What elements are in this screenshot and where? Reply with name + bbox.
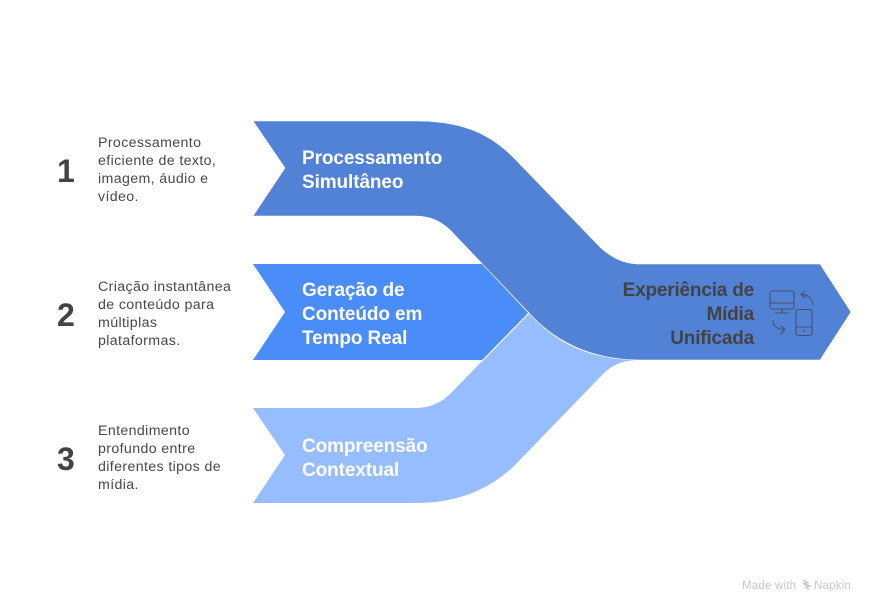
description 2: múltiplas — [98, 315, 157, 331]
heading: Experiência de Mídia Unificada: Experiência de — [623, 280, 754, 301]
description 2: Criação instantânea — [98, 279, 231, 295]
heading: Processamento Simultâneo: Simultâneo — [302, 172, 403, 193]
description 2: de conteúdo para — [98, 297, 214, 313]
heading: Experiência de Mídia Unificada: Mídia — [706, 304, 755, 325]
band 2: Geração de Conteúdo em Tempo Real — [253, 264, 529, 360]
band 1: Processamento Simultâneo, merged output arrow — [253, 121, 851, 360]
description 1: Processamento — [98, 135, 201, 151]
watermark: Made with Napkin: Napkin — [814, 580, 851, 592]
number 2: 2 — [57, 297, 75, 333]
description 3: profundo entre — [98, 441, 195, 457]
description 3: mídia. — [98, 477, 139, 493]
watermark: Made with Napkin: Made with — [742, 580, 796, 592]
band 3: Compreensão Contextual — [253, 313, 640, 503]
description 3: diferentes tipos de — [98, 459, 221, 475]
description 1: vídeo. — [98, 189, 139, 205]
heading: Processamento Simultâneo: Processamento — [302, 148, 442, 169]
icon: devices syncing — [770, 291, 813, 336]
description 1: imagem, áudio e — [98, 171, 208, 187]
heading: Experiência de Mídia Unificada: Unificada — [670, 328, 755, 349]
description 2: plataformas. — [98, 333, 181, 349]
heading: Geração de Conteúdo em Tempo Real: Geração de — [302, 280, 404, 301]
heading: Compreensão Contextual: Contextual — [302, 460, 399, 481]
heading: Geração de Conteúdo em Tempo Real: Tempo Real — [302, 328, 407, 349]
heading: Geração de Conteúdo em Tempo Real: Conteúdo em — [302, 304, 422, 325]
number 1: 1 — [57, 153, 75, 189]
heading: Compreensão Contextual: Compreensão — [302, 436, 428, 457]
description 1: eficiente de texto, — [98, 153, 216, 169]
watermark: Made with Napkin — [742, 579, 851, 592]
number 3: 3 — [57, 441, 75, 477]
description 3: Entendimento — [98, 423, 190, 439]
divider between bands — [482, 264, 529, 361]
